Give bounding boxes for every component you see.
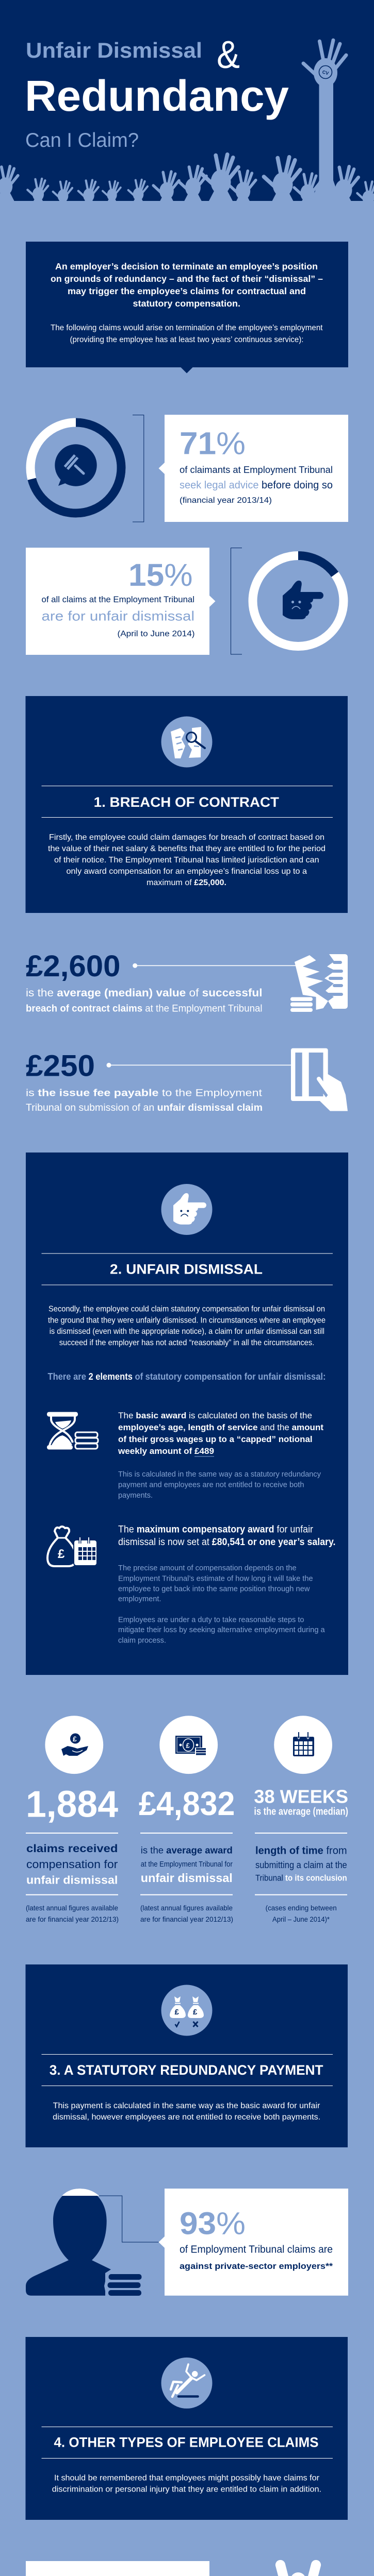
panel: introduction (26, 242, 348, 373)
body text: maximum of £25,000. (147, 878, 226, 887)
icon: banknote and coins: £ (186, 1741, 190, 1750)
card text (180, 2244, 333, 2271)
description: breach of contract claims at the Employment Tribunal (26, 1004, 262, 1014)
icon: pointing hand with sad face (283, 581, 323, 619)
body text: of their notice. The Employment Tribunal has limited jurisdiction and can (54, 856, 319, 865)
intro lead text: An employer’s decision to terminate an employee’s position (55, 261, 318, 272)
callout card (26, 548, 216, 655)
icon: banknote and coins (159, 1716, 218, 1774)
description: unfair dismissal (26, 1874, 118, 1887)
basic award text: payment and employees are not entitled to receive both (118, 1481, 304, 1489)
subtitle: Can I Claim? (25, 129, 139, 151)
title: unfair dismissal: Unfair Dismissal (26, 38, 202, 62)
stat: 93 percent private sector (26, 2189, 348, 2296)
card text: seek legal advice before doing so (180, 480, 333, 491)
compensatory award text: Employment Tribunal’s estimate of how long it will take the (118, 1574, 313, 1583)
divider bottom (26, 1894, 118, 1895)
card text (41, 595, 195, 638)
intro note: (providing the employee has at least two years’ continuous service): (70, 335, 303, 344)
donut chart 15 percent (253, 555, 344, 646)
description: claims received (26, 1842, 118, 1855)
body text: Secondly, the employee could claim statutory compensation for unfair dismissal on (48, 1304, 325, 1313)
card text (180, 465, 333, 505)
header banner (0, 0, 374, 225)
body text (52, 2474, 321, 2494)
body text: succeed if the employer has not acted “reasonably” in all the circumstances. (59, 1338, 314, 1347)
divider top (140, 1833, 233, 1834)
donut chart 71 percent (30, 422, 121, 513)
basic award text: The basic award is calculated on the basis of the (118, 1411, 312, 1420)
card text: of claimants at Employment Tribunal (180, 465, 333, 475)
body text: It should be remembered that employees might possibly have claims for (54, 2474, 320, 2483)
compensatory award text: The maximum compensatory award for unfair (118, 1524, 314, 1535)
compensatory award text: The precise amount of compensation depends on the (118, 1564, 297, 1572)
card text: of Employment Tribunal claims are (180, 2244, 333, 2256)
basic award text: weekly amount of £489 (118, 1446, 214, 1456)
panel: unfair dismissal (26, 1153, 348, 1675)
heading rules and title: 2. UNFAIR DISMISSAL (110, 1261, 263, 1277)
stat: 2,600 pounds average breach award: £2,600 (26, 950, 120, 983)
stat column: average award (139, 1716, 235, 1923)
icon: money bag and calendar (47, 1527, 97, 1566)
body text: the value of their net salary & benefits that they are entitled to for the period (48, 844, 326, 853)
icon: torn contract and coins (290, 954, 348, 1012)
divider bottom (255, 1894, 347, 1895)
intro note (51, 324, 323, 344)
divider top (26, 1833, 118, 1834)
callout card (159, 2189, 348, 2296)
heading rules and title: 4. OTHER TYPES OF EMPLOYEE CLAIMS (54, 2435, 319, 2450)
stat: 250 pounds issue fee (26, 1048, 348, 1113)
icon: two money bags with tick and cross: £ (193, 2008, 198, 2016)
description (26, 1842, 118, 1887)
basic award text: payments. (118, 1491, 153, 1500)
figure: is the average (median) (254, 1806, 348, 1818)
body text (48, 1304, 326, 1347)
card text: against private-sector employers** (180, 2261, 333, 2271)
title: redundancy: Redundancy (25, 72, 289, 120)
panel: other types of employee claims (26, 2337, 348, 2520)
description: at the Employment Tribunal for (141, 1860, 233, 1869)
divider bottom (140, 1894, 233, 1895)
compensatory award text (118, 1524, 335, 1645)
stat: 250 pounds issue fee: £250 (26, 1049, 95, 1083)
divider top (255, 1833, 347, 1834)
bracket (133, 415, 144, 522)
icon: two money bags with tick and cross: £ (174, 2008, 180, 2016)
icon: gavel in speech bubble (55, 444, 97, 486)
intro lead text: may trigger the employee’s claims for contractual and (68, 286, 306, 296)
stat: 77 percent worth bringing claim (26, 2560, 347, 2576)
body text: is dismissed (even with the appropriate notice), a claim for unfair dismissal can still (50, 1327, 324, 1336)
footnote: April – June 2014)* (272, 1915, 330, 1923)
footnote: are for financial year 2012/13) (26, 1915, 119, 1923)
footnote: (latest annual figures available (140, 1904, 233, 1912)
card text: (April to June 2014) (118, 630, 195, 638)
intro lead text (51, 261, 323, 309)
figure (254, 1786, 348, 1818)
icon: employee silhouette with coins (26, 2189, 141, 2296)
footnote: (cases ending between (266, 1904, 337, 1912)
bracket (231, 548, 242, 654)
icon: group of celebrating people (275, 2560, 321, 2576)
footnote (26, 1904, 119, 1923)
figure: 38 WEEKS (254, 1786, 348, 1807)
heading rules and title: 1. BREACH OF CONTRACT (94, 794, 280, 810)
callout card (26, 2561, 216, 2576)
body text: Firstly, the employee could claim damages for breach of contract based on (49, 833, 324, 842)
body text: This payment is calculated in the same way as the basic award for unfair (53, 2102, 320, 2110)
raised hand holding CV: CV (322, 70, 329, 76)
body text: only award compensation for an employee’s financial loss up to a (66, 867, 307, 876)
icon: person slipping (161, 2358, 213, 2409)
icon: pointing hand with sad face (161, 1184, 213, 1235)
panel: statutory redundancy payment (26, 1964, 348, 2147)
card text: (financial year 2013/14) (180, 496, 272, 505)
intro lead text: statutory compensation. (133, 298, 240, 309)
description: compensation for (26, 1858, 118, 1871)
compensatory award text: employee to get back into the same position through new (118, 1585, 310, 1593)
description: is the average award (141, 1844, 233, 1856)
description (26, 987, 262, 1014)
footnote: (latest annual figures available (26, 1904, 118, 1912)
description (26, 1087, 263, 1113)
icon: hand receiving coin (45, 1716, 103, 1774)
stat: 2,600 pounds average breach award (26, 950, 348, 1014)
big figure: 93% (180, 2206, 246, 2241)
description: is the average (median) value of successful (26, 987, 262, 999)
body text (48, 833, 326, 887)
icon: hand receiving coin: £ (73, 1735, 77, 1743)
panel: breach of contract (26, 696, 348, 913)
intro note: The following claims would arise on termination of the employee’s employment (51, 324, 323, 332)
big figure: 71% (180, 426, 246, 461)
card text: are for unfair dismissal (41, 608, 194, 623)
basic award text: employee’s age, length of service and the amount (118, 1422, 323, 1432)
icon: torn contract with magnifier (161, 716, 213, 768)
compensatory award text: mitigate their loss by seeking alternative employment during a (118, 1625, 325, 1634)
icon: hand holding card (291, 1048, 348, 1111)
heading rules and title: 3. A STATUTORY REDUNDANCY PAYMENT (50, 2062, 323, 2078)
big figure: 15% (128, 557, 193, 592)
description (255, 1845, 347, 1883)
compensatory award text: claim process. (118, 1636, 166, 1645)
description: is the issue fee payable to the Employment (26, 1087, 263, 1098)
figure: £4,832 (139, 1785, 235, 1822)
figure: 1,884 (26, 1784, 118, 1825)
stat: 15 percent unfair dismissal (26, 548, 344, 655)
stat column: claims received (26, 1716, 119, 1923)
icon: calendar (274, 1716, 332, 1774)
title: ampersand: & (217, 33, 240, 76)
icon: hourglass and coins (47, 1412, 98, 1450)
leader line (106, 1063, 291, 1067)
footnote (266, 1904, 337, 1923)
card text: of all claims at the Employment Tribunal (41, 595, 194, 604)
compensatory award text: Employees are under a duty to take reasonable steps to (118, 1615, 304, 1624)
compensatory award text: dismissal is now set at £80,541 or one year’s salary. (118, 1537, 335, 1548)
body text (53, 2102, 320, 2122)
description: submitting a claim at the (255, 1860, 347, 1870)
callout card (159, 415, 348, 522)
connector line (99, 2196, 159, 2242)
body text: dismissal, however employees are not entitled to receive both payments. (53, 2113, 320, 2122)
basic award text: of their gross wages up to a “capped” notional (118, 1434, 313, 1444)
basic award text (118, 1411, 323, 1500)
body text: discrimination or personal injury that they are entitled to claim in addition. (52, 2485, 321, 2494)
description: Tribunal on submission of an unfair dismissal claim (26, 1102, 263, 1113)
intro lead text: on grounds of redundancy – and the fact of their “dismissal” – (51, 274, 323, 284)
description: unfair dismissal (141, 1871, 233, 1885)
basic award text: This is calculated in the same way as a statutory redundancy (118, 1470, 321, 1479)
description (141, 1844, 233, 1885)
footnote (140, 1904, 233, 1923)
icon: two money bags with tick and cross (161, 1985, 213, 2036)
crowd of raised hands (0, 155, 374, 225)
body text: the ground that they were unfairly dismissed. In circumstances where an employee (48, 1316, 326, 1325)
stat column: length of time (254, 1716, 348, 1923)
leader line (133, 963, 296, 968)
footnote: are for financial year 2012/13) (140, 1915, 233, 1923)
compensatory award text: employment. (118, 1595, 161, 1603)
sub heading: There are 2 elements of statutory compensation for unfair dismissal: (47, 1371, 326, 1382)
description: length of time from (255, 1845, 347, 1857)
icon: money bag and calendar: £ (58, 1547, 65, 1561)
stat: 71 percent seek legal advice (30, 415, 348, 522)
description: Tribunal to its conclusion (255, 1874, 347, 1883)
raised hand holding CV (303, 40, 346, 201)
